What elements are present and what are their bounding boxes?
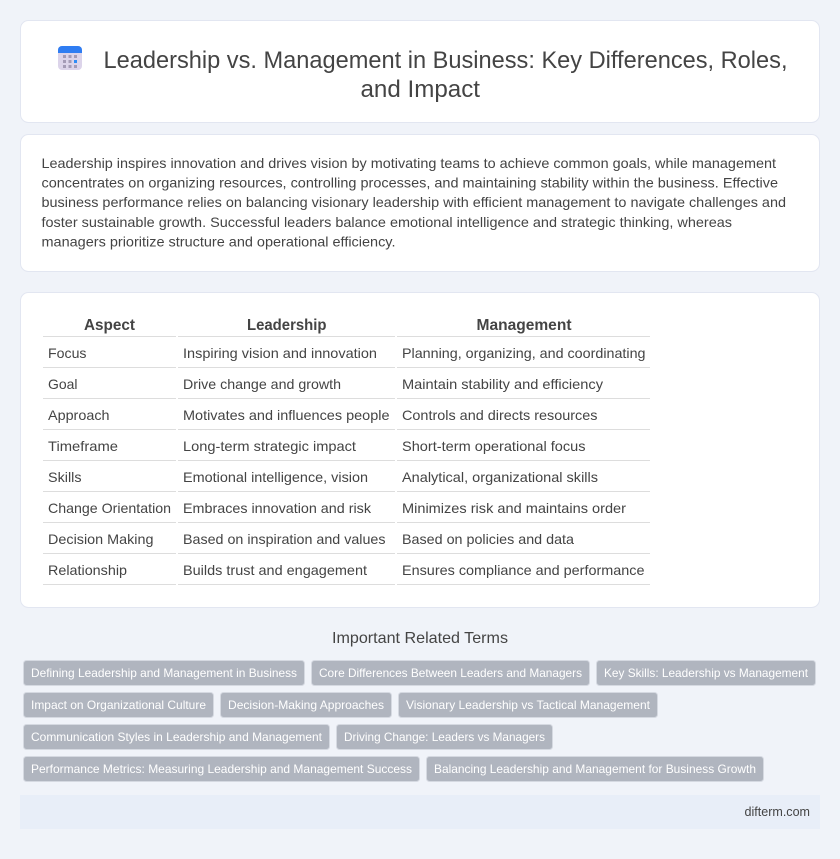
tag: Defining Leadership and Management in Business: Defining Leadership and Management in Business: [31, 666, 297, 680]
tag: Decision-Making Approaches: Decision-Making Approaches: [228, 698, 384, 712]
table row: Skills: Analytical, organizational skills: [402, 469, 598, 485]
tag: Communication Styles in Leadership and Management: Communication Styles in Leadership and Management: [31, 730, 323, 744]
table row: Timeframe: Long-term strategic impact: [183, 438, 356, 454]
table row: Relationship: Ensures compliance and performance: [402, 562, 645, 578]
tag: Key Skills: Leadership vs Management: Key Skills: Leadership vs Management: [604, 666, 809, 680]
table row: Change Orientation: Change Orientation: [48, 500, 171, 516]
table row: Timeframe: Short-term operational focus: [402, 438, 586, 454]
table row: Change Orientation: [43, 500, 650, 522]
panel: comparison table card: [20, 292, 820, 608]
table row: Decision Making: Based on policies and data: [402, 531, 574, 547]
table row: Approach: Approach: [48, 407, 110, 423]
text block: summary paragraph: concentrates on organizing resources, controlling processes, and maintaining stability within the business. Effective: [42, 175, 778, 191]
table row: Skills: [43, 469, 650, 492]
table row: Goal: Drive change and growth: [183, 376, 341, 392]
table row: Decision Making: Based on inspiration and values: [183, 531, 386, 547]
table row: Goal: [43, 376, 650, 398]
table row: Focus: Inspiring vision and innovation: [183, 345, 377, 361]
tag: Driving Change: Leaders vs Managers: Driving Change: Leaders vs Managers: [344, 730, 545, 744]
tag: Performance Metrics: Measuring Leadership and Management Success: [24, 756, 420, 782]
table row: Skills: Emotional intelligence, vision: [183, 469, 368, 485]
table row: Change Orientation: Minimizes risk and maintains order: [402, 500, 626, 516]
icon: calendar: [58, 46, 82, 70]
tag: Visionary Leadership vs Tactical Management: [398, 692, 658, 718]
text block: summary paragraph: managers prioritize structure and operational efficiency.: [42, 233, 396, 249]
table header row: Aspect: [84, 317, 136, 334]
table row: Timeframe: [43, 438, 650, 460]
tag: Core Differences Between Leaders and Managers: Core Differences Between Leaders and Managers: [319, 666, 582, 680]
title: and Impact: [360, 76, 480, 103]
title: [104, 47, 788, 103]
panel: summary card: [20, 134, 820, 272]
tag: Decision-Making Approaches: [220, 692, 392, 718]
tag: Communication Styles in Leadership and Management: [24, 724, 330, 750]
table row: Focus: Planning, organizing, and coordinating: [402, 345, 646, 361]
title: Leadership vs. Management in Business: Key Differences, Roles,: [104, 47, 788, 74]
table row: Decision Making: [43, 531, 650, 554]
tag: Balancing Leadership and Management for Business Growth: Balancing Leadership and Management for Business Growth: [434, 762, 756, 776]
panel: related term tags: [24, 660, 816, 782]
tag: Key Skills: Leadership vs Management: [596, 660, 816, 686]
table row: Focus: [43, 345, 650, 368]
tag: Impact on Organizational Culture: [24, 692, 214, 718]
table row: Decision Making: Decision Making: [48, 531, 154, 547]
text block: summary paragraph: [42, 155, 786, 249]
table row: Relationship: Builds trust and engagement: [183, 562, 367, 578]
text block: summary paragraph: business performance relies on balancing visionary leadership with efficient management to navigate challenges and: [42, 194, 786, 210]
footer bar: [20, 795, 820, 829]
tag: Impact on Organizational Culture: Impact on Organizational Culture: [31, 698, 206, 712]
table row: Timeframe: Timeframe: [48, 438, 118, 454]
table row: Approach: [43, 407, 650, 430]
tag: Balancing Leadership and Management for Business Growth: [426, 756, 764, 782]
tag: Defining Leadership and Management in Business: [24, 660, 304, 686]
table row: Change Orientation: Embraces innovation and risk: [183, 500, 372, 516]
text block: summary paragraph: Leadership inspires innovation and drives vision by motivating teams to achieve common goals, while management: [42, 155, 776, 171]
table row: Relationship: Relationship: [48, 562, 127, 578]
table row: Approach: Motivates and influences people: [183, 407, 390, 423]
footer source: difterm.com: difterm.com: [744, 804, 810, 819]
table header row: [43, 317, 650, 336]
table row: Focus: Focus: [48, 345, 86, 361]
table header row: Leadership: [247, 317, 327, 334]
table row: Relationship: [43, 562, 650, 584]
tag: Performance Metrics: Measuring Leadership and Management Success: Performance Metrics: Measuring Leadership and Management Success: [31, 762, 412, 776]
table row: Approach: Controls and directs resources: [402, 407, 598, 423]
heading: important related terms: Important Related Terms: [332, 630, 508, 647]
table row: Goal: Maintain stability and efficiency: [402, 376, 603, 392]
table header row: Management: [476, 317, 572, 334]
table row: Goal: Goal: [48, 376, 78, 392]
tag: Visionary Leadership vs Tactical Management: Visionary Leadership vs Tactical Management: [406, 698, 651, 712]
tag: Driving Change: Leaders vs Managers: [336, 724, 552, 750]
comparison table: [43, 317, 650, 584]
tag: Core Differences Between Leaders and Managers: [312, 660, 590, 686]
table row: Skills: Skills: [48, 469, 82, 485]
panel: title card: [20, 20, 820, 122]
text block: summary paragraph: foster sustainable growth. Successful leaders balance emotional intelligence and strategic thinking, whereas: [42, 214, 732, 230]
